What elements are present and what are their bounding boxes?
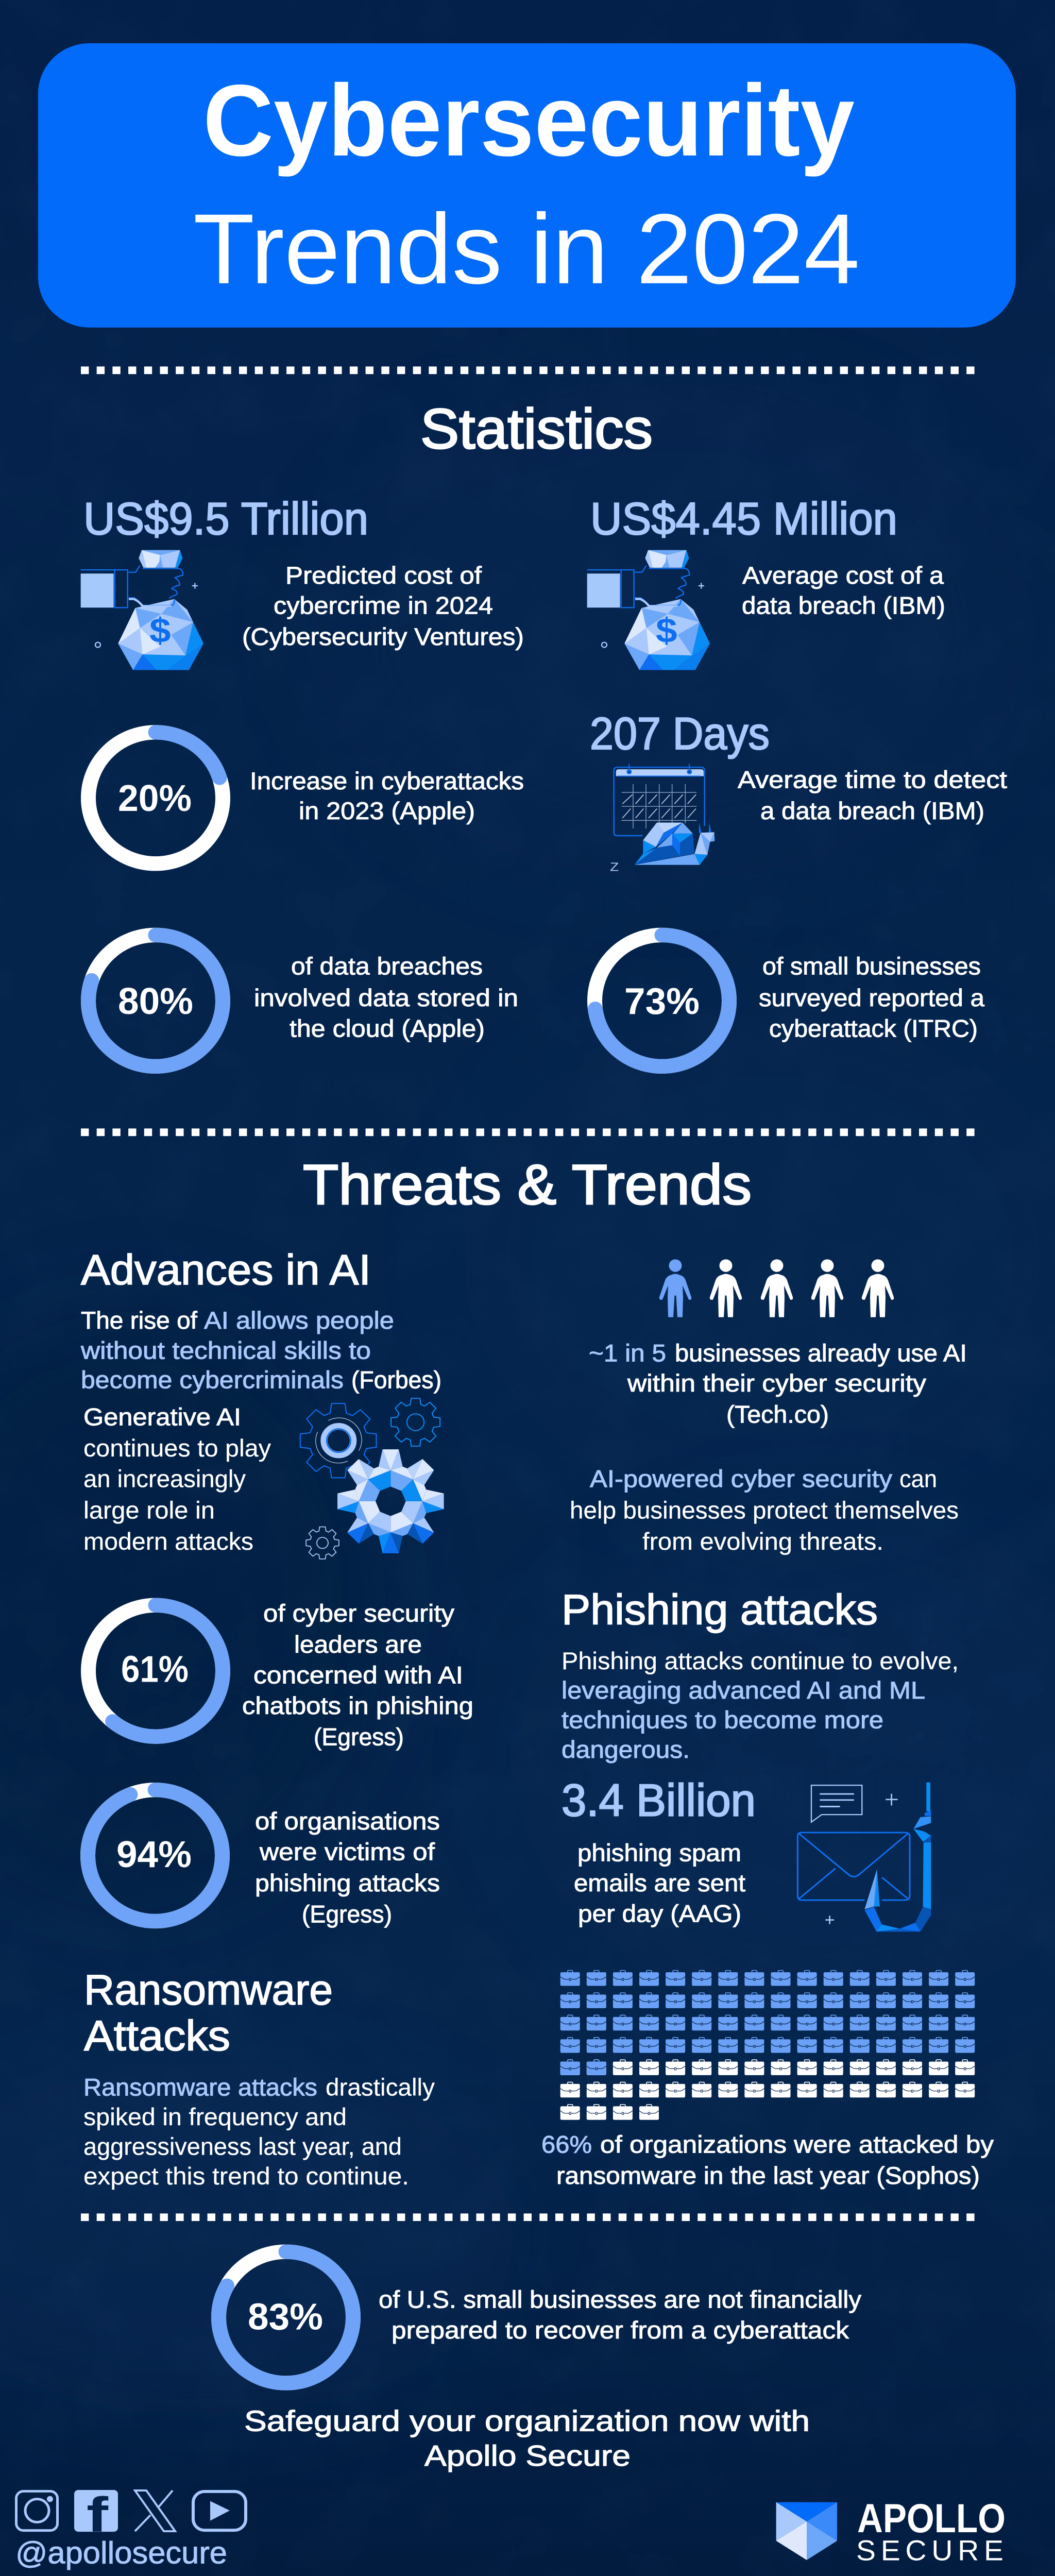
donut chart: 94%: 94% [116,1834,192,1875]
text block: 1 in 5 [589,1340,967,1429]
icon: Facebook: f [87,2487,109,2543]
description: of cyber security [263,1600,454,1627]
handle: @apollosecure [15,2535,227,2570]
text block: without technical skills to [80,1337,371,1365]
icon: hand holding money bag [81,550,203,670]
text block: become cybercriminals [81,1367,344,1394]
description: surveyed reported a [759,985,985,1012]
donut chart: 61%: 61% [121,1649,189,1690]
donut chart: 73% [594,935,729,1066]
icon: Instagram [16,2491,58,2531]
title banner: Trends in 2024 [193,194,860,304]
icon: hand holding money bag: $ [656,612,677,650]
description: the cloud (Apple) [290,1015,485,1043]
description [742,562,945,619]
text block: 1 in 5: (Tech.co) [726,1401,829,1429]
stat: 80% of data breaches [89,935,518,1066]
description [574,1840,745,1927]
icon: YouTube [193,2492,246,2530]
text block: leveraging advanced AI and ML [561,1677,925,1704]
description: data breach (IBM) [742,592,945,619]
text block: 1 in 5: within their cyber security [627,1370,926,1397]
text block [83,2074,435,2190]
description: ransomware in the last year (Sophos) [556,2163,980,2190]
text block: generative AI: an increasingly [83,1466,246,1493]
description [242,562,524,651]
call to action [244,2405,810,2472]
panel: ransomware attacks [83,1966,994,2190]
description: a data breach (IBM) [760,798,984,825]
icon: X [135,2490,175,2531]
donut chart: 83% [218,2252,353,2383]
text block: 1 in 5: businesses already use AI [675,1340,967,1367]
pictogram: 66 of 100 organizations [560,1971,975,2120]
panel: phishing attacks [561,1585,959,1931]
description: cyberattack (ITRC) [769,1015,978,1043]
description [242,1600,473,1751]
wordmark [856,2496,1006,2567]
donut chart: 20%: 20% [118,778,192,819]
text block: AI-powered security: can [899,1466,937,1493]
description: of data breaches [291,953,483,980]
description: Average cost of a [742,562,944,589]
text block: spiked in frequency and [83,2104,347,2131]
stat: US$9.5 Trillion [81,493,524,670]
donut chart: 94% [88,1790,223,1921]
description: leaders are [294,1632,422,1658]
text block: dangerous. [561,1737,690,1764]
description: emails are sent [574,1870,745,1897]
description: (Cybersecurity Ventures) [242,623,524,651]
icon: email on fish hook [797,1783,931,1931]
shield mark [776,2502,837,2560]
text block: generative AI: modern attacks [83,1528,253,1555]
wordmark: APOLLO [857,2496,1006,2541]
description: concerned with AI [253,1662,463,1689]
text block: expect this trend to continue. [83,2163,409,2190]
icon: calendar with snail [610,764,714,873]
description [738,767,1007,825]
figure: US$9.5 Trillion [83,493,368,544]
description [254,953,518,1043]
description: chatbots in phishing [242,1693,473,1720]
text block: generative AI: continues to play [83,1435,271,1462]
text block: generative AI [83,1404,271,1555]
description [255,1808,440,1928]
donut chart: 83%: 83% [248,2296,323,2337]
stat: 20% increase in cyberattacks [89,732,524,863]
stat: 73% of small businesses [594,935,985,1066]
text block: techniques to become more [561,1707,883,1734]
figure: US$4.45 Million [590,493,897,544]
heading [84,1966,333,2059]
donut chart: 80% [89,935,223,1066]
icon: five people [659,1259,894,1317]
description [541,2131,994,2190]
icon: calendar with snail: Z [610,860,619,873]
text block: Phishing attacks continue to evolve, [561,1648,959,1675]
call to action: Apollo Secure [424,2440,631,2472]
description: involved data stored in [254,985,518,1012]
icon: hand holding money bag [587,550,710,670]
heading: Statistics: Statistics [420,398,653,461]
description: Average time to detect [738,767,1007,793]
text block: AI allows people [204,1308,394,1334]
text block: AI-powered security: AI-powered cyber security [590,1466,892,1493]
description: of small businesses [762,953,981,980]
call to action: Safeguard your organization now with [244,2405,810,2438]
description: 66% [541,2131,592,2159]
description: phishing attacks [255,1870,440,1897]
stat: US$4.45 Million [587,493,945,670]
stat: 61% of leaders [89,1600,473,1751]
figure: 3.4 Billion: 3.4 Billion [561,1774,756,1825]
donut chart: 20% [89,732,223,863]
text block: drastically [326,2074,435,2101]
icon: hand holding money bag: $ [149,612,171,650]
description [379,2286,861,2344]
description [759,953,985,1043]
description: in 2023 (Apple) [299,798,475,825]
stat: 83% not financially prepared [218,2252,861,2383]
description: Increase in cyberattacks [250,768,524,795]
description: of organisations [255,1808,440,1835]
icon: Facebook [74,2487,118,2543]
description: prepared to recover from a cyberattack [392,2317,849,2344]
text block: (Forbes) [351,1367,441,1394]
title banner: Cybersecurity [203,64,855,177]
donut chart: 80%: 80% [118,981,193,1022]
text block [561,1648,959,1764]
donut chart: 61% [89,1605,223,1737]
stat: 207 Days [590,708,1007,873]
heading: Attacks [84,2011,230,2059]
text block: aggressiveness last year, and [83,2133,402,2160]
description: cybercrime in 2024 [274,592,493,619]
donut chart: 73%: 73% [624,981,700,1022]
description: (Egress) [302,1901,392,1928]
social links [15,2487,246,2570]
stat: 94% of organisations [88,1790,440,1928]
text block: Ransomware attacks [83,2074,317,2101]
text block: AI-powered security: from evolving threats. [642,1528,883,1555]
description [250,768,524,825]
text block: generative AI: Generative AI [83,1404,241,1431]
text block: AI-powered security [570,1466,959,1555]
text block: The rise of [81,1308,198,1334]
heading: Ransomware [84,1966,333,2013]
description: phishing spam [577,1840,741,1867]
description: (Egress) [314,1724,404,1751]
description: Predicted cost of [285,562,482,589]
text block: generative AI: large role in [83,1497,215,1524]
description: of organizations were attacked by [600,2131,994,2159]
text block: 1 in 5: ~1 in 5 [589,1340,666,1367]
description: per day (AAG) [578,1901,741,1927]
panel: AI in business [570,1259,967,1555]
description: were victims of [259,1839,435,1866]
heading: Advances in AI [81,1246,371,1294]
description: of U.S. small businesses are not financially [379,2286,861,2313]
panel: advances in AI [80,1246,444,1559]
heading: Phishing attacks [561,1585,878,1633]
text block: AI-powered security: help businesses protect themselves [570,1497,959,1524]
text block [80,1308,441,1394]
wordmark: SECURE [856,2534,1003,2567]
figure: 207 Days [590,708,770,759]
title banner [38,43,1016,328]
icon: gears [300,1398,444,1559]
heading: Threats and Trends: Threats & Trends [303,1154,752,1216]
logo: Apollo Secure [776,2496,1006,2567]
